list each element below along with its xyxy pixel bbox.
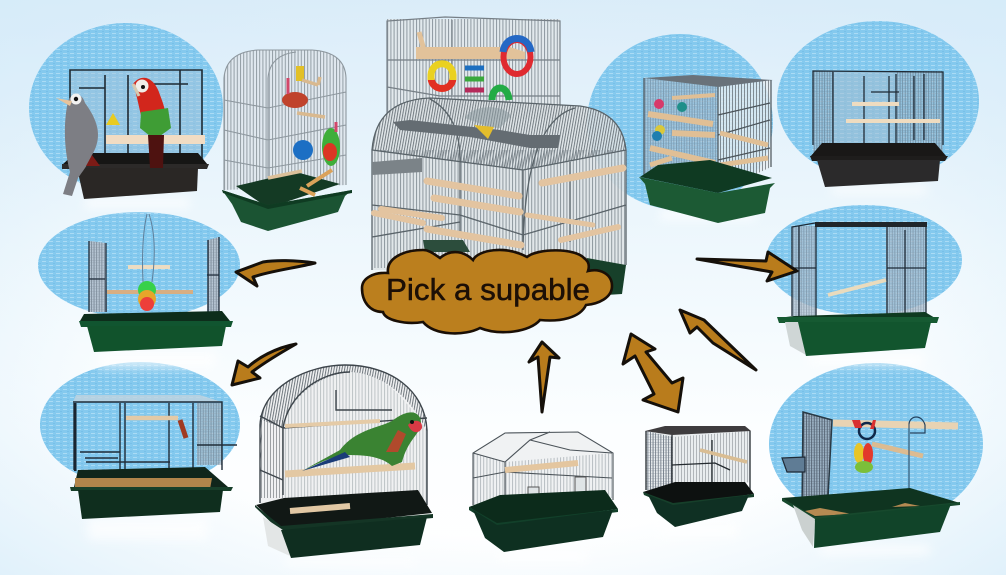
cage: tall rear cage, centre bbox=[387, 17, 560, 119]
icon: yellow toy bbox=[106, 113, 120, 125]
cage: middle right, dark frame bbox=[777, 222, 939, 356]
arrow: to middle left cage bbox=[236, 261, 315, 286]
cage: bottom centre, peaked roof bbox=[469, 432, 618, 552]
cage: bottom, small dark bbox=[643, 426, 754, 527]
cage: top right B, dark mesh bbox=[810, 71, 948, 187]
arrow: to bottom left cage bbox=[232, 344, 296, 385]
cage: dark with two parrots, top left bbox=[56, 70, 209, 199]
cage: dome with green tray bbox=[222, 50, 352, 231]
arrow: up to cloud bbox=[529, 342, 559, 412]
tray reflections bbox=[85, 186, 930, 566]
icon: feather toy bbox=[138, 281, 156, 311]
icon: red macaw bbox=[133, 78, 171, 168]
cage: bottom right, open door bbox=[782, 412, 960, 548]
cage: large domed cage, centre bbox=[372, 98, 626, 296]
icon: grey parrot bbox=[56, 94, 100, 196]
heading text: Pick a supable bbox=[386, 272, 590, 307]
toys bbox=[268, 66, 340, 195]
icon: ring and feather toy bbox=[852, 420, 876, 473]
arrow: lower right to cloud bbox=[680, 310, 756, 370]
icon: food basket bbox=[782, 457, 805, 472]
arrow: to middle right cage bbox=[697, 252, 797, 281]
perches bbox=[374, 168, 623, 245]
cage: middle left, open bbox=[79, 214, 233, 352]
cage: bottom left, seed tray bbox=[70, 395, 237, 519]
arrow: double headed, diagonal bbox=[623, 334, 683, 412]
icon: green parrot bbox=[302, 412, 422, 471]
icon: hanging rings and toys bbox=[431, 38, 531, 100]
cage: bottom centre-left dome with green parrot bbox=[255, 365, 433, 558]
cage: top right A, on blue bbox=[639, 75, 775, 223]
cloud label: Pick a supable bbox=[362, 250, 612, 333]
